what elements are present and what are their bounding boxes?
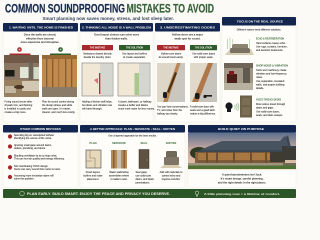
- text: voices through doors: Most voices travel through: [256, 103, 286, 106]
- icon: door: [240, 96, 252, 118]
- text: solution note: [122, 52, 148, 59]
- intro text: panel 3: [172, 32, 203, 40]
- column: plan: Smart layout,: [86, 171, 101, 174]
- title: COMMON SOUNDPROOFING: [5, 3, 125, 16]
- list item: identifying the source: [8, 134, 54, 140]
- list item: ignoring small gaps: [8, 144, 52, 150]
- label: the mistake: THE MISTAKE: [90, 46, 106, 50]
- text: voices through doors: seals, and door sweeps.: [256, 114, 283, 117]
- intro text: panel 1: more expensive and disruptive.: [21, 40, 60, 44]
- text: solution description: much more noise for less money.: [118, 108, 155, 110]
- list item: not coordinating hvac: Ducts can carry sound from room to room.: [14, 168, 61, 171]
- label: the solution: THE SOLUTION: [126, 48, 143, 50]
- banner: bottom call to action: [3, 189, 296, 198]
- text: solution note: with proper seals.: [194, 56, 214, 59]
- list item: assuming insulation: Assuming more insulation alone will: [14, 174, 54, 178]
- text: solution description: [42, 100, 75, 114]
- list item: not coordinating hvac: Not coordinating HVAC design.: [14, 165, 49, 168]
- text: mistake description: hallway too clearly.: [157, 112, 178, 116]
- column: separate: it matters most.: [110, 178, 128, 181]
- text: mistake note: [159, 52, 184, 59]
- column: seal: use solid-core: [136, 174, 152, 178]
- text: mistake note: Hollow-core doors: [161, 52, 182, 56]
- text: echo and reverberation: ECHO & REVERBERATION: [256, 36, 284, 40]
- column: plan: buffers and noise: [83, 174, 103, 178]
- list item: identifying the source: identifying the source of the noise.: [14, 137, 52, 140]
- illustration: sofa with sound waves: [225, 38, 254, 55]
- text: mistake description: You can hear conversations,: [157, 106, 189, 108]
- heading: panel 1: 1. WAITING UNTIL THE HOME IS FINISHED: [9, 26, 73, 30]
- text: shop noise and vibration: Use separation, insulated: [256, 80, 285, 83]
- photo: open stud walls: [42, 55, 77, 97]
- text: shop noise and vibration: vibration and low-frequency: [256, 72, 287, 76]
- text: shop noise and vibration: SHOP NOISE & VIBRATION: [256, 64, 288, 68]
- text: shop noise and vibration: [256, 64, 288, 90]
- text: solution note: [192, 52, 216, 59]
- text: shop noise and vibration: noise.: [256, 76, 263, 79]
- text: solution description: A solid-core door with: [190, 106, 215, 108]
- text: solution description: cleaner, and much less costly.: [42, 111, 75, 114]
- text: mistake note: beside the laundry room.: [84, 56, 112, 59]
- column: separate: assemblies where: [109, 174, 130, 178]
- text: echo and reverberation: [256, 36, 288, 52]
- heading: build quiet: BUILD QUIET ON PURPOSE: [218, 127, 264, 131]
- column: soften: Add soft materials to: [160, 171, 183, 174]
- column: seal: doors, and block: [136, 178, 155, 181]
- floor plan: closet buffer: [118, 63, 150, 96]
- heading: other mistakes: OTHER COMMON MISTAKES: [20, 127, 61, 131]
- column: plan: PLAN: [89, 141, 97, 145]
- panel: waiting until the home is finished: [3, 23, 78, 122]
- list item: not coordinating hvac: [8, 165, 61, 171]
- list item: ignoring small gaps: Ignoring small gaps around doors,: [14, 144, 52, 147]
- banner text: a little planning: A little planning now = a lifetime of comfort.: [204, 192, 280, 196]
- text: echo and reverberation: Use rugs, curtains, furniture,: [256, 46, 288, 48]
- column: soften: [160, 141, 183, 181]
- label: the mistake: THE MISTAKE: [163, 46, 179, 50]
- text: mistake description: [82, 100, 113, 110]
- text: solution description: creates a buffer and blocks: [118, 104, 149, 107]
- intro text: panel 2: than thicker walls.: [105, 36, 128, 40]
- text: solution description: the design phase and while: [42, 104, 73, 107]
- label: the solution: THE SOLUTION: [52, 56, 69, 58]
- icon: light bulb: [195, 191, 199, 196]
- list item: identifying the source: Spending big on soundproof without: [14, 134, 54, 137]
- text: mistake note: let sound travel easily.: [159, 56, 184, 59]
- text: solution note: Use solid-core doors: [192, 52, 216, 56]
- icon: sound waves: [234, 103, 239, 111]
- panel: thinking all noise is a wall problem: [80, 23, 155, 122]
- list item: blocking ventilation: This can hurt air quality and energy efficiency.: [14, 158, 65, 160]
- list item: assuming insulation: solve the problem.: [14, 178, 35, 180]
- text: solution note: Use layout and buffers: [122, 52, 148, 56]
- photo: solid door cross-section: [190, 63, 217, 102]
- intro text: panel 2: [94, 32, 140, 40]
- caption: build quiet: It's smart design, careful planning,: [221, 176, 264, 180]
- floor plan: bedroom next to laundry: [82, 63, 113, 96]
- list item: assuming insulation: [8, 174, 54, 180]
- column: separate: Water wall/ceiling: [109, 171, 129, 174]
- photo: hollow door cross-section: [157, 63, 185, 102]
- text: mistake description: [157, 106, 189, 116]
- text: echo and reverberation: and acoustic treatments.: [256, 49, 284, 52]
- text: mistake description: Adding a thicker wall helps,: [82, 100, 113, 104]
- text: mistake note: [83, 52, 112, 59]
- text: mistake description: Fixing sound issues after: [4, 100, 32, 104]
- text: solution description: seals and a good latch: [190, 109, 216, 112]
- list item: blocking ventilation: [8, 154, 65, 160]
- icon: mistake x: [17, 47, 22, 52]
- column: plan: placement.: [87, 178, 99, 181]
- intro text: better approach: Use a layered approach for the best results.: [108, 134, 157, 138]
- text: mistake description: drywall, trim, and flooring: [4, 104, 33, 107]
- intro text: panel 1: [21, 32, 60, 44]
- text: solution description: walls are open. It's easier,: [42, 108, 71, 110]
- text: echo and reverberation: Hard surfaces cause echo.: [256, 42, 286, 45]
- subtitle: Smart planning now saves money, stress, and lost sleep later.: [42, 16, 174, 21]
- text: solution description: makes a big difference.: [190, 112, 216, 116]
- text: mistake description: TV, and noise from the: [157, 109, 183, 112]
- title: MISTAKES TO AVOID: [126, 3, 214, 16]
- column: soften: control echo and: [162, 174, 181, 178]
- label: the solution: THE SOLUTION: [195, 48, 212, 50]
- text: voices through doors: VOICES THROUGH DOORS: [256, 98, 281, 102]
- text: mistake description: still travel through.: [82, 108, 103, 110]
- banner text: plan early: PLAN EARLY. BUILD SMART. ENJOY THE PEACE AND PRIVACY YOU DESERVE.: [27, 192, 170, 196]
- text: solution note: to create separation.: [123, 56, 146, 59]
- caption: build quiet: [218, 172, 266, 184]
- caption: build quiet: A quiet barndominium isn't luck.: [222, 172, 262, 176]
- caption: build quiet: and the right details in the right places.: [218, 180, 266, 184]
- text: mistake description: but doors and vibration can: [82, 104, 113, 107]
- label: the mistake: THE MISTAKE: [12, 55, 28, 58]
- text: solution description: [190, 106, 216, 116]
- intro text: panel 3: Hollow doors are a major: [172, 32, 203, 36]
- text: mistake description: creates a big mess.: [4, 111, 26, 114]
- text: solution description: A closet, bathroom, or hallway: [118, 100, 152, 104]
- text: solution description: [118, 100, 155, 110]
- heading: focus: FOCUS ON THE REAL SOURCE: [237, 20, 283, 24]
- intro text: panel 1: Once the walls are closed,: [24, 32, 56, 36]
- list item: ignoring small gaps: outlets, plumbing, and ducts.: [14, 147, 46, 150]
- heading: panel 3: 3. UNDERESTIMATING DOORS: [160, 26, 215, 30]
- text: voices through doors: Use solid-core doors,: [256, 110, 280, 114]
- column: separate: SEPARATE: [112, 141, 126, 145]
- intro text: panel 1: effective fixes become: [26, 36, 54, 40]
- text: solution description: Plan for sound control during: [42, 100, 75, 104]
- photo: workshop: [224, 63, 253, 90]
- heading: better approach: A BETTER APPROACH: PLAN • SEPARATE • SEAL • SOFTEN: [90, 127, 175, 131]
- panel: other common mistakes: [3, 125, 78, 188]
- text: mistake description: is installed is costly and: [4, 108, 31, 110]
- text: shop noise and vibration: details.: [256, 87, 264, 90]
- panel: focus on the real source: [222, 17, 296, 122]
- panel: underestimating doors: [155, 23, 220, 122]
- text: mistake note: Bedrooms shared directly: [83, 52, 112, 56]
- column: seal: Seal gaps,: [136, 171, 148, 174]
- text: shop noise and vibration: Tools and machinery create: [256, 69, 287, 72]
- photo: finished living room: [4, 55, 39, 97]
- column: soften: improve comfort.: [162, 178, 181, 181]
- panel: build quiet on purpose: [188, 125, 296, 188]
- icon: head profile: [225, 102, 233, 112]
- text: mistake description: [4, 100, 33, 114]
- text: voices through doors: [256, 98, 286, 117]
- text: shop noise and vibration: walls, and proper building: [256, 84, 285, 86]
- column: seal: [136, 141, 155, 184]
- text: voices through doors: doors and gaps.: [256, 106, 274, 110]
- column: seal: penetrations.: [136, 182, 150, 184]
- column: plan: [83, 141, 103, 181]
- icon: shield check: [20, 191, 24, 196]
- intro text: focus: Different noises need different solutions.: [237, 28, 282, 31]
- panel: a better approach: [80, 125, 185, 188]
- icon: solution check: [58, 47, 63, 52]
- photo: barndominium at dusk: [188, 132, 296, 170]
- heading: panel 2: 2. THINKING ALL NOISE IS A WALL PROBLEM: [82, 26, 152, 30]
- column: seal: SEAL: [141, 141, 148, 145]
- column: soften: SOFTEN: [166, 141, 176, 145]
- list item: blocking ventilation: Blocking ventilation to try to stop noise.: [14, 154, 58, 158]
- intro text: panel 3: weak spot for sound.: [175, 36, 201, 40]
- intro text: panel 2: Good layout choices can solve more: [94, 32, 140, 36]
- column: separate: [109, 141, 130, 181]
